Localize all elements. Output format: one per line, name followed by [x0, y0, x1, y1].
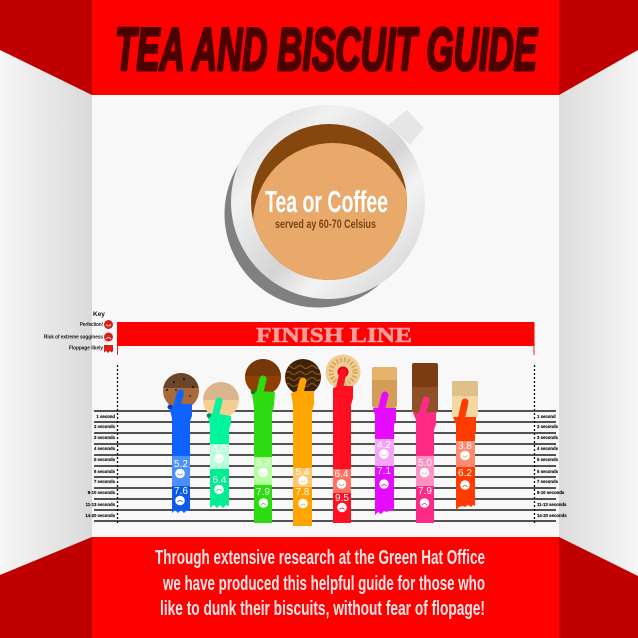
biscuit 5: red arm	[326, 354, 360, 523]
biscuit	[163, 373, 199, 409]
key: Key	[93, 311, 105, 318]
score bad: 6.2	[458, 468, 472, 479]
left wall	[0, 0, 92, 638]
left time labels: 11-13 seconds	[86, 502, 116, 507]
cup heading: Tea or Coffee	[265, 184, 388, 219]
score good: 6.4	[335, 469, 349, 480]
cup handle	[388, 110, 424, 145]
left time labels: 5 seconds	[94, 457, 116, 462]
cup rim	[231, 105, 425, 299]
arm	[373, 395, 396, 515]
right time labels: 7 seconds	[537, 479, 559, 484]
biscuit 3: green arm	[245, 359, 281, 523]
key	[44, 311, 113, 353]
score bad: 7.9	[418, 486, 432, 497]
right time labels: 3 seconds	[537, 435, 559, 440]
biscuit	[452, 381, 478, 418]
score bad	[256, 487, 270, 508]
score bad: 9.5	[335, 493, 349, 504]
biscuit	[372, 367, 397, 408]
header band	[92, 0, 559, 95]
right time labels: 1 second	[537, 414, 556, 419]
cup subheading: served ay 60-70 Celsius	[275, 219, 376, 231]
left time labels: 3 seconds	[94, 435, 116, 440]
score good	[296, 467, 310, 485]
biscuit 7: pink arm	[412, 363, 438, 523]
finish line: FINISH LINE	[256, 323, 412, 347]
arm	[413, 400, 436, 523]
coffee cup	[224, 105, 425, 308]
arm	[291, 381, 314, 526]
arm	[168, 393, 192, 513]
score bad	[418, 486, 432, 508]
arm	[207, 401, 231, 508]
arm	[453, 402, 476, 510]
right time labels: 8-10 seconds	[537, 490, 565, 495]
left time labels: 2 seconds	[94, 424, 116, 429]
key: perfection: Perfection!	[80, 322, 103, 328]
biscuit	[203, 382, 239, 418]
biscuit	[412, 363, 438, 413]
left time labels: 1 second	[96, 414, 115, 419]
score good: 5.0	[418, 458, 432, 469]
score good	[377, 440, 391, 459]
biscuit 6: magenta arm	[372, 367, 397, 515]
score good: 4.2	[377, 440, 391, 451]
footer text	[155, 546, 485, 620]
time grid	[85, 365, 567, 525]
right time labels: 2 seconds	[537, 424, 559, 429]
arm	[333, 372, 353, 523]
biscuit 4: orange arm	[285, 359, 321, 526]
right time labels: 11-13 seconds	[537, 502, 567, 507]
biscuit 2: mint arm	[203, 382, 239, 508]
score bad: 7.9	[256, 487, 270, 498]
score good: 5.2	[174, 459, 188, 470]
right time labels: 5 seconds	[537, 457, 559, 462]
right time labels: 6 seconds	[537, 469, 559, 474]
score good: 3.8	[458, 441, 472, 452]
footer band	[92, 537, 559, 638]
score bad: 7.8	[296, 487, 310, 498]
score good	[335, 469, 349, 489]
milky surface	[253, 143, 407, 280]
footer text: like to dunk their biscuits, without fear of flopage!	[160, 597, 485, 620]
finish line	[117, 322, 534, 355]
cup shadow	[224, 120, 412, 308]
biscuit	[285, 359, 321, 395]
score good	[256, 458, 270, 477]
left time labels: 8-10 seconds	[88, 490, 116, 495]
dark tea	[251, 124, 407, 280]
left time labels: 7 seconds	[94, 479, 116, 484]
biscuit 1: blue arm	[163, 373, 199, 513]
score good	[418, 458, 432, 477]
score bad: 7.1	[377, 466, 391, 477]
score good: 4.0	[213, 444, 227, 455]
right time labels: 4 seconds	[537, 446, 559, 451]
left time labels: 14-20 seconds	[85, 513, 116, 518]
score bad	[335, 493, 349, 512]
biscuit	[326, 354, 360, 390]
right wall	[559, 0, 638, 638]
right time labels: 14-20 seconds	[537, 513, 567, 518]
score bad: 6.4	[213, 475, 227, 486]
right time labels	[537, 414, 567, 518]
biscuit 8: orange-red arm	[452, 381, 478, 510]
score bad: 7.6	[174, 486, 188, 497]
score bad	[296, 487, 310, 508]
key: sogginess: Risk of extreme sogginess	[44, 334, 103, 340]
biscuit	[245, 359, 281, 395]
arm	[251, 379, 275, 523]
left time labels	[85, 414, 116, 518]
score good: 5.2	[256, 458, 270, 469]
left time labels: 4 seconds	[94, 446, 116, 451]
score good: 5.4	[296, 467, 310, 478]
key: floppage: Floppage likely	[69, 346, 103, 352]
left time labels: 6 seconds	[94, 469, 116, 474]
score bad	[377, 466, 391, 489]
